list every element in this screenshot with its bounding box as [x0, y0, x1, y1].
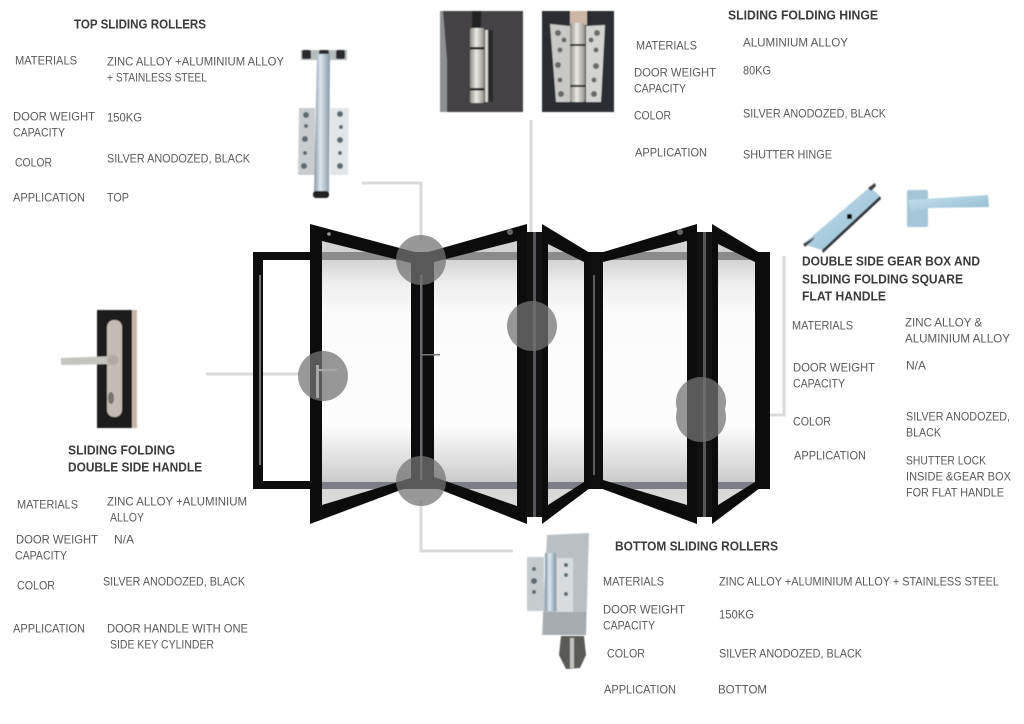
section: gear box and flat handle: APPLICATION	[794, 448, 866, 462]
leaf 1	[310, 224, 422, 524]
section: top sliding rollers: 150KG	[107, 110, 142, 124]
section: bottom sliding rollers: 150KG	[719, 608, 754, 622]
section: top sliding rollers: + STAINLESS STEEL	[107, 70, 207, 84]
section: sliding folding hinge: SILVER ANODOZED, BLACK	[743, 106, 886, 120]
section: bottom sliding rollers: SILVER ANODOZED, BLACK	[719, 646, 862, 660]
section: gear box and flat handle: INSIDE &GEAR BOX	[906, 470, 1011, 484]
product: double side handle	[61, 310, 137, 428]
leaf 4	[600, 224, 697, 524]
section: sliding folding hinge: COLOR	[634, 108, 671, 122]
section: bottom sliding rollers: MATERIALS	[603, 574, 664, 588]
section: bottom sliding rollers: APPLICATION	[604, 682, 676, 696]
leaf 3	[542, 224, 590, 524]
section: bottom sliding rollers: ZINC ALLOY +ALUMINIUM ALLOY + STAINLESS STEEL	[719, 574, 999, 588]
section: double side handle: COLOR	[17, 578, 55, 592]
section: sliding folding hinge: APPLICATION	[635, 146, 707, 160]
heading: TOP SLIDING ROLLERS	[74, 18, 206, 32]
heading: BOTTOM SLIDING ROLLERS	[615, 540, 778, 554]
leaf 2	[421, 224, 527, 524]
heading: DOUBLE SIDE HANDLE	[68, 460, 202, 474]
section: gear box and flat handle	[792, 254, 1011, 500]
section: sliding folding hinge: SHUTTER HINGE	[743, 148, 832, 162]
section: bottom sliding rollers: BOTTOM	[718, 682, 767, 696]
section: sliding folding hinge: CAPACITY	[634, 82, 686, 96]
section: sliding folding hinge: MATERIALS	[636, 38, 697, 52]
section: double side handle: ALLOY	[110, 510, 144, 524]
section: top sliding rollers: MATERIALS	[15, 54, 77, 68]
section: top sliding rollers: DOOR WEIGHT	[13, 110, 96, 124]
heading: DOUBLE SIDE GEAR BOX AND	[802, 254, 980, 268]
section: double side handle: DOOR HANDLE WITH ONE	[107, 622, 248, 636]
section: bottom sliding rollers: CAPACITY	[603, 618, 655, 632]
highlight circles	[298, 235, 726, 506]
product: hinge photo right	[542, 11, 614, 112]
section: gear box and flat handle: ZINC ALLOY &	[905, 316, 982, 330]
heading	[802, 254, 980, 304]
section: top sliding rollers: ZINC ALLOY +ALUMINIUM ALLOY	[107, 54, 284, 68]
section: bottom sliding rollers: DOOR WEIGHT	[603, 602, 686, 616]
heading: SLIDING FOLDING SQUARE	[802, 272, 963, 286]
section: gear box and flat handle: SILVER ANODOZED,	[906, 410, 1010, 424]
section: top sliding rollers: TOP	[107, 190, 129, 204]
section: sliding folding hinge	[634, 8, 886, 162]
section: top sliding rollers: SILVER ANODOZED, BLACK	[107, 152, 250, 166]
door outer frame	[253, 252, 770, 489]
section: double side handle	[13, 444, 248, 652]
door handle on leaf 1	[316, 365, 337, 398]
section: sliding folding hinge: 80KG	[743, 64, 771, 78]
product: hinge photo left	[440, 11, 523, 112]
section: gear box and flat handle: BLACK	[906, 426, 941, 440]
section: double side handle: SIDE KEY CYLINDER	[110, 638, 214, 652]
product: gear box	[803, 183, 881, 253]
heading: FLAT HANDLE	[802, 290, 886, 304]
section: double side handle: ZINC ALLOY +ALUMINIUM	[107, 494, 247, 508]
section: gear box and flat handle: ALUMINIUM ALLOY	[905, 332, 1010, 346]
section: double side handle: APPLICATION	[13, 622, 85, 636]
heading	[68, 444, 202, 474]
heading: SLIDING FOLDING	[68, 444, 175, 458]
section: gear box and flat handle: N/A	[906, 358, 926, 372]
section: bottom sliding rollers: COLOR	[607, 646, 645, 660]
section: gear box and flat handle: CAPACITY	[793, 376, 845, 390]
section: bottom sliding rollers	[603, 540, 999, 696]
section: top sliding rollers: CAPACITY	[13, 126, 65, 140]
section: top sliding rollers: COLOR	[15, 156, 52, 170]
section: gear box and flat handle: FOR FLAT HANDLE	[906, 486, 1004, 500]
section: double side handle: MATERIALS	[17, 498, 78, 512]
section: double side handle: DOOR WEIGHT	[16, 532, 99, 546]
product: top sliding roller	[298, 50, 349, 198]
section: double side handle: SILVER ANODOZED, BLACK	[103, 574, 245, 588]
section: double side handle: CAPACITY	[15, 548, 67, 562]
section: top sliding rollers: APPLICATION	[13, 190, 85, 204]
folding door illustration	[253, 224, 770, 524]
product: bottom sliding roller	[527, 533, 589, 669]
section: double side handle: N/A	[114, 532, 134, 546]
section: gear box and flat handle: SHUTTER LOCK	[906, 454, 986, 468]
section: sliding folding hinge: DOOR WEIGHT	[634, 66, 717, 80]
section: gear box and flat handle: MATERIALS	[792, 318, 853, 332]
section: gear box and flat handle: COLOR	[793, 414, 831, 428]
connector lines	[206, 120, 784, 551]
product: square flat handle	[907, 190, 989, 227]
center mullion	[411, 256, 434, 482]
heading: SLIDING FOLDING HINGE	[728, 8, 878, 22]
section: gear box and flat handle: DOOR WEIGHT	[793, 360, 876, 374]
leaf 5	[712, 224, 760, 524]
section: top sliding rollers	[13, 18, 284, 204]
section: sliding folding hinge: ALUMINIUM ALLOY	[743, 36, 848, 50]
